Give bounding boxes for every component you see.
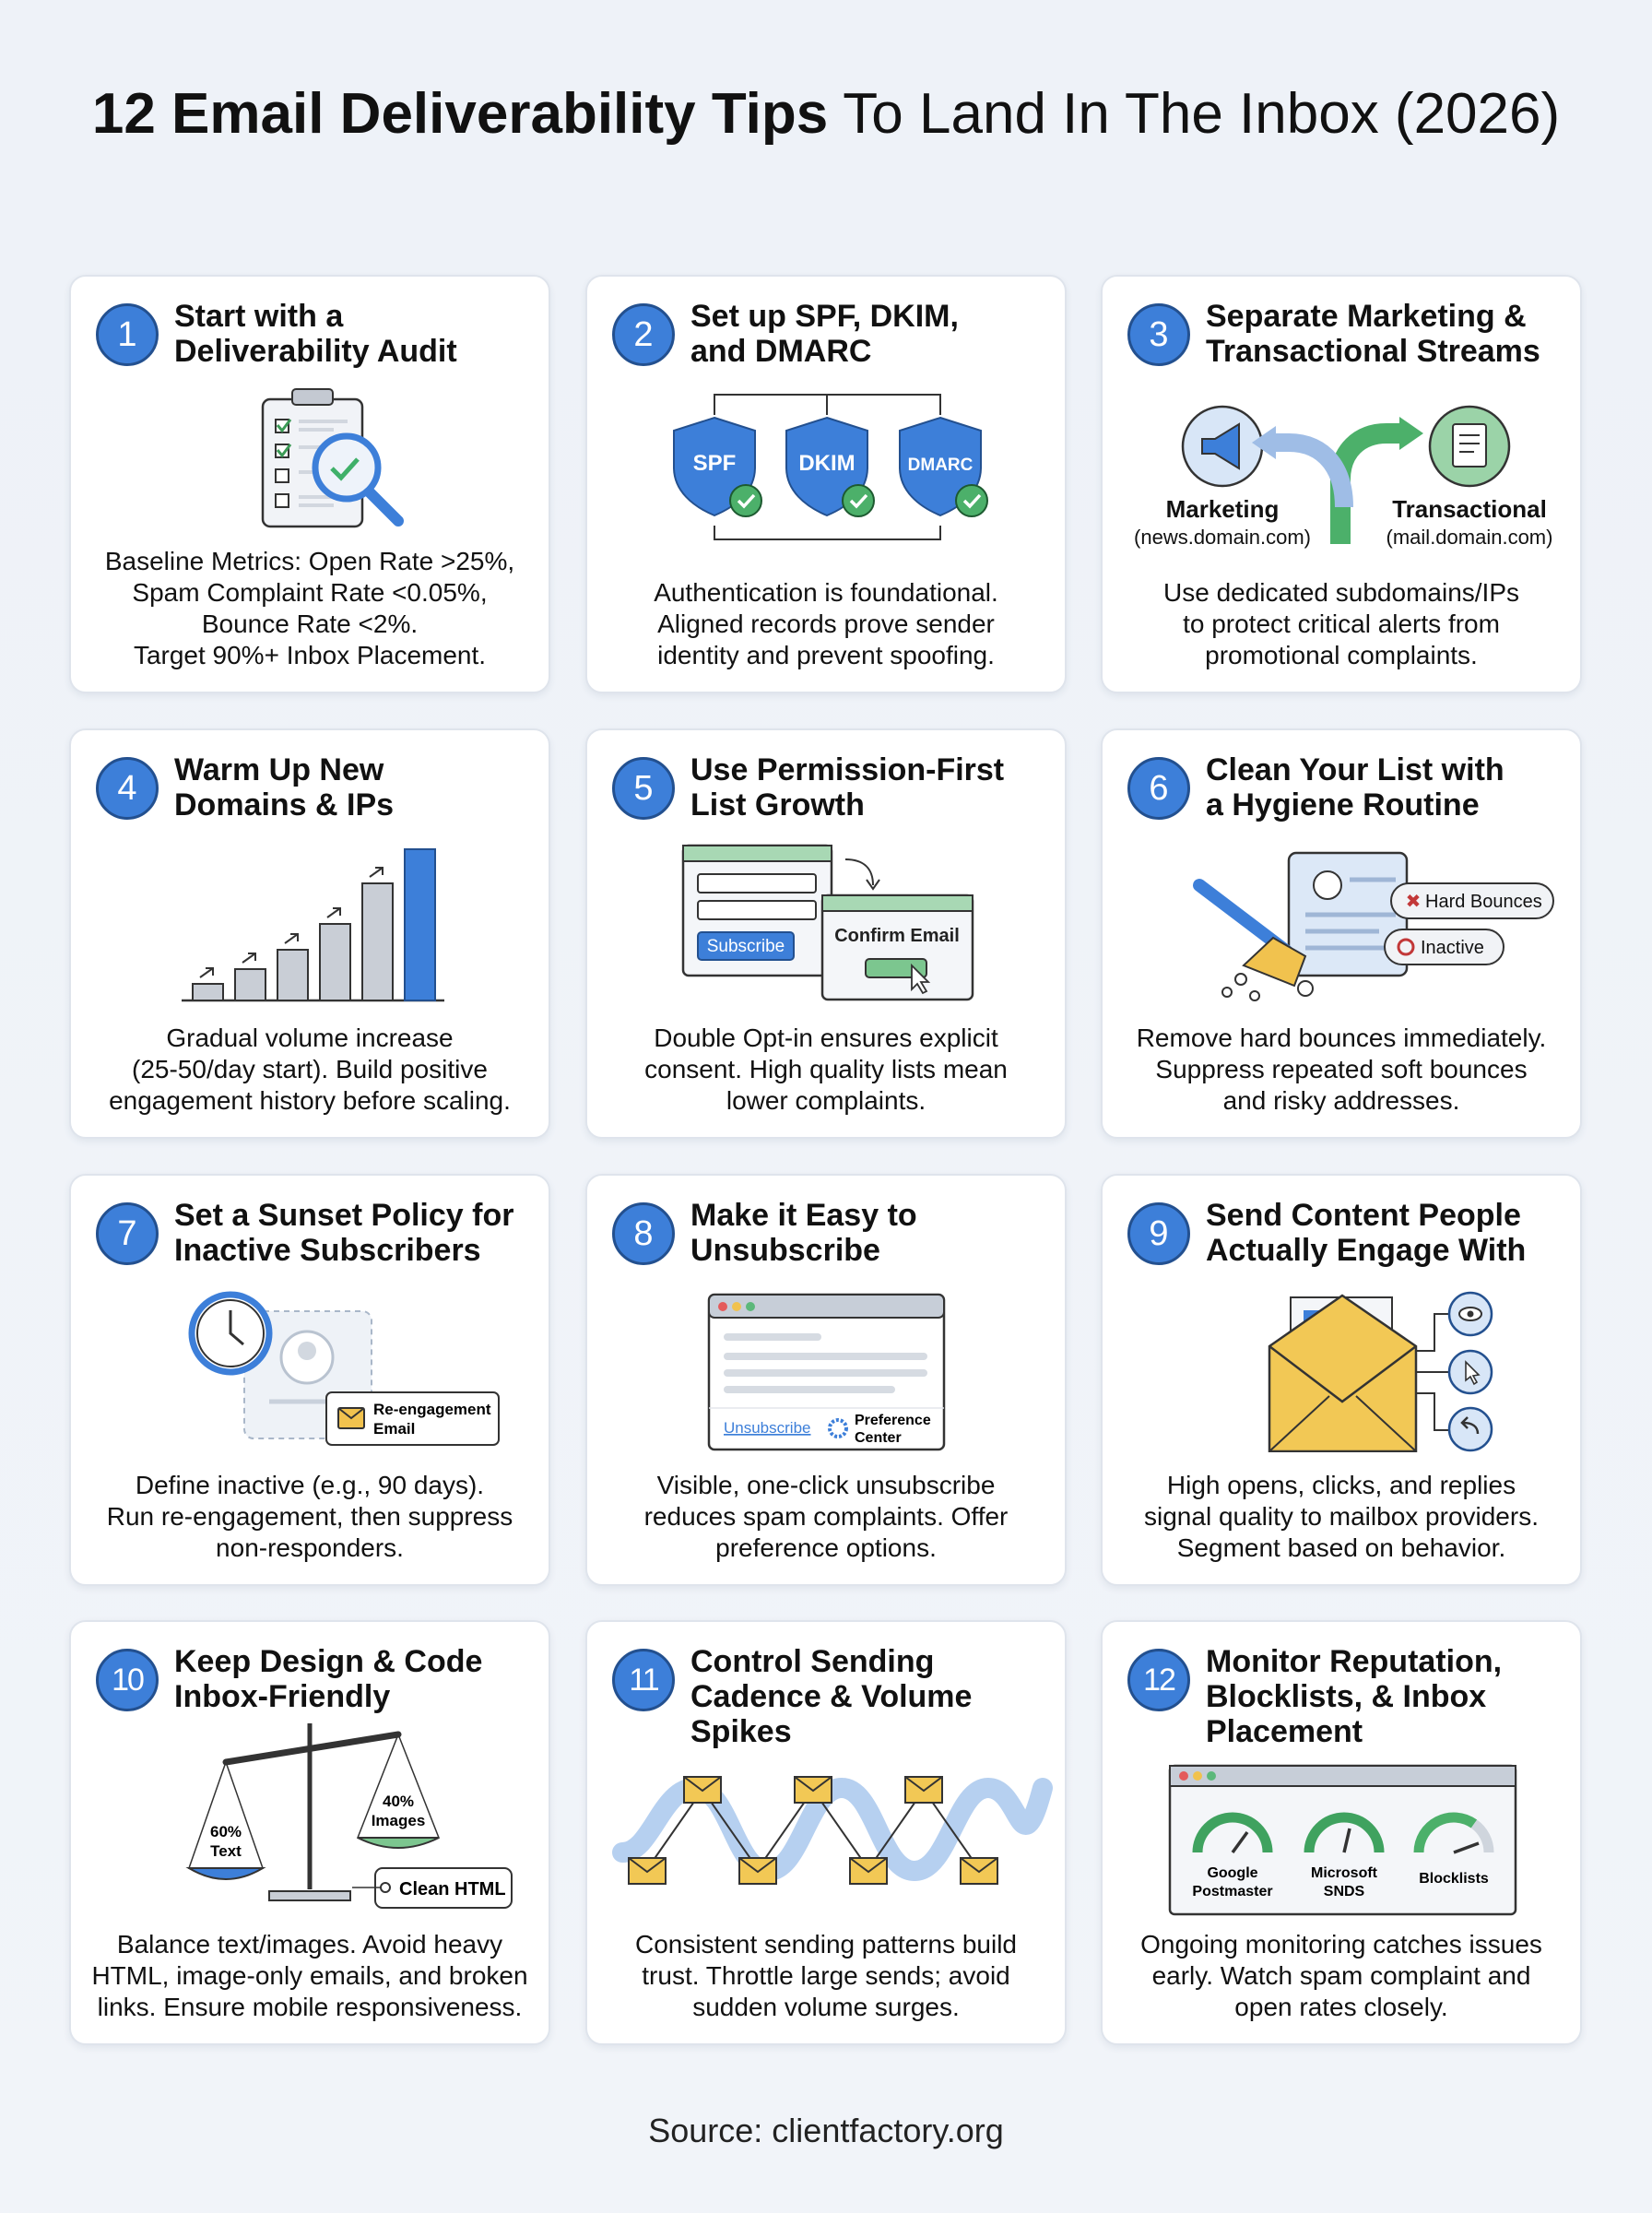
heading 9: Actually Engage With [1206, 1233, 1526, 1268]
number 1 [96, 303, 159, 366]
heading 12: Monitor Reputation, [1206, 1644, 1502, 1679]
body text 6: and risky addresses. [1223, 1086, 1459, 1115]
body text 11 [635, 1930, 1017, 2021]
number 7: 7 [117, 1214, 137, 1253]
body text 5: consent. High quality lists mean [644, 1055, 1008, 1083]
body text 3: to protect critical alerts from [1183, 609, 1500, 638]
panel: tip 11 cadence [585, 1620, 1067, 2045]
body text 9: Segment based on behavior. [1177, 1533, 1505, 1562]
number 6 [1127, 757, 1190, 820]
icon: split streams [1134, 406, 1552, 549]
heading 2 [690, 299, 959, 369]
heading 8: Unsubscribe [690, 1233, 880, 1268]
heading 10 [174, 1644, 482, 1714]
heading 1: Deliverability Audit [174, 334, 457, 369]
heading 12 [1206, 1644, 1502, 1749]
heading 4: Warm Up New [174, 752, 384, 787]
number 8 [612, 1202, 675, 1265]
number 12: 12 [1143, 1663, 1174, 1698]
icon: email window with unsubscribe: Center [855, 1430, 902, 1446]
body text 6 [1137, 1024, 1546, 1115]
heading 7: Inactive Subscribers [174, 1233, 481, 1268]
icon: brush list: Hard Bounces [1425, 892, 1542, 912]
icon: clock and profile [188, 1291, 500, 1446]
panel: tip 4 warm up [69, 728, 550, 1139]
body text 12: early. Watch spam complaint and [1152, 1961, 1530, 1990]
heading 5 [690, 752, 1004, 822]
panel: tip 12 monitor [1101, 1620, 1582, 2045]
number 8: 8 [633, 1214, 654, 1253]
body text 5: Double Opt-in ensures explicit [654, 1024, 998, 1052]
heading 1 [174, 299, 457, 369]
number 9 [1127, 1202, 1190, 1265]
heading 6: Clean Your List with [1206, 752, 1504, 787]
icon: clock and profile: Re-engagement [373, 1401, 491, 1418]
heading 6: a Hygiene Routine [1206, 787, 1480, 822]
body text 7 [107, 1471, 513, 1562]
panel: tip 10 design [69, 1620, 550, 2045]
heading 6 [1206, 752, 1504, 822]
icon: shields [673, 394, 988, 540]
icon: split streams: Marketing [1166, 495, 1279, 523]
icon: dashboard gauges: Google [1207, 1865, 1258, 1881]
icon: wave with envelopes [612, 1776, 1053, 1885]
icon: dashboard gauges: SNDS [1324, 1884, 1365, 1899]
body text 11: sudden volume surges. [692, 1993, 960, 2021]
heading 11 [690, 1644, 972, 1749]
body text 7: Run re-engagement, then suppress [107, 1502, 513, 1531]
body text 11: trust. Throttle large sends; avoid [642, 1961, 1010, 1990]
heading 9: Send Content People [1206, 1198, 1521, 1233]
body text 10: HTML, image-only emails, and broken [91, 1961, 528, 1990]
number 10: 10 [112, 1663, 143, 1698]
icon: brush list: Inactive [1421, 938, 1484, 958]
heading 2: and DMARC [690, 334, 871, 369]
body text 11: Consistent sending patterns build [635, 1930, 1017, 1959]
body text 5: lower complaints. [726, 1086, 926, 1115]
body text 2: identity and prevent spoofing. [657, 641, 995, 669]
number 3 [1127, 303, 1190, 366]
number 6: 6 [1149, 769, 1169, 808]
source footer: Source: clientfactory.org [648, 2112, 1004, 2149]
icon: email window with unsubscribe: Preference [855, 1413, 931, 1428]
icon: dashboard gauges: Blocklists [1419, 1871, 1489, 1887]
body text 2: Authentication is foundational. [654, 578, 998, 607]
body text 9 [1144, 1471, 1539, 1562]
icon: balance scale: Text [210, 1842, 242, 1860]
body text 4: Gradual volume increase [166, 1024, 454, 1052]
icon: brush list [1193, 852, 1554, 1001]
icon: clipboard magnifier [262, 388, 404, 527]
body text 12 [1140, 1930, 1542, 2021]
body text 1: Bounce Rate <2%. [202, 609, 418, 638]
heading 5: List Growth [690, 787, 865, 822]
body text 12: open rates closely. [1234, 1993, 1448, 2021]
body text 10 [91, 1930, 528, 2021]
number 3: 3 [1149, 315, 1169, 354]
panel: tip 3 streams [1101, 275, 1582, 693]
icon: dashboard gauges [1169, 1765, 1517, 1916]
body text 2: Aligned records prove sender [657, 609, 995, 638]
heading 11: Control Sending [690, 1644, 934, 1679]
number 12 [1127, 1649, 1190, 1711]
body text 1: Baseline Metrics: Open Rate >25%, [105, 547, 514, 575]
icon: dashboard gauges: Postmaster [1192, 1884, 1273, 1899]
panel: tip 8 unsubscribe [585, 1174, 1067, 1586]
body text 3 [1163, 578, 1519, 669]
body text 8: reduces spam complaints. Offer [644, 1502, 1008, 1531]
icon: dashboard gauges: Microsoft [1311, 1865, 1378, 1881]
body text 1: Spam Complaint Rate <0.05%, [132, 578, 488, 607]
heading 10: Keep Design & Code [174, 1644, 482, 1679]
heading 2: Set up SPF, DKIM, [690, 299, 959, 334]
icon: balance scale: 40% [383, 1793, 414, 1810]
heading 4 [174, 752, 394, 822]
heading 3 [1206, 299, 1540, 369]
icon: email window with unsubscribe [708, 1293, 946, 1451]
panel: tip 7 sunset [69, 1174, 550, 1586]
body text 7: Define inactive (e.g., 90 days). [136, 1471, 484, 1499]
panel: tip 5 permission [585, 728, 1067, 1139]
body text 12: Ongoing monitoring catches issues [1140, 1930, 1542, 1959]
body text 5 [644, 1024, 1008, 1115]
panel: tip 2 auth [585, 275, 1067, 693]
heading 9 [1206, 1198, 1526, 1268]
heading 7: Set a Sunset Policy for [174, 1198, 513, 1233]
heading 10: Inbox-Friendly [174, 1679, 390, 1714]
icon: brush list: ✖ [1406, 892, 1421, 912]
icon: shields: DKIM [798, 451, 856, 476]
number 4: 4 [117, 769, 137, 808]
body text 8: Visible, one-click unsubscribe [657, 1471, 995, 1499]
number 1: 1 [117, 315, 137, 354]
number 2: 2 [633, 315, 654, 354]
panel: tip 6 hygiene [1101, 728, 1582, 1139]
body text 10: Balance text/images. Avoid heavy [117, 1930, 502, 1959]
body text 3: promotional complaints. [1205, 641, 1478, 669]
body text 1: Target 90%+ Inbox Placement. [134, 641, 486, 669]
number 10 [96, 1649, 159, 1711]
heading 7 [174, 1198, 513, 1268]
icon: double opt-in windows: Subscribe [707, 937, 785, 956]
heading 11: Spikes [690, 1714, 792, 1749]
icon: double opt-in windows [682, 845, 974, 1001]
number 5 [612, 757, 675, 820]
icon: email window with unsubscribe: Unsubscribe [724, 1419, 811, 1437]
body text 1 [105, 547, 514, 669]
icon: balance scale [186, 1723, 513, 1909]
icon: clock and profile: Email [373, 1420, 415, 1438]
icon: split streams: (news.domain.com) [1134, 526, 1311, 549]
heading 8 [690, 1198, 917, 1268]
heading 12: Placement [1206, 1714, 1363, 1749]
panel: tip 1 audit [69, 275, 550, 693]
icon: balance scale: 60% [210, 1823, 242, 1840]
body text 4: engagement history before scaling. [109, 1086, 511, 1115]
number 7 [96, 1202, 159, 1265]
number 2 [612, 303, 675, 366]
heading 12: Blocklists, & Inbox [1206, 1679, 1486, 1714]
heading 8: Make it Easy to [690, 1198, 917, 1233]
chart: growing bars [182, 848, 444, 1001]
heading 1: Start with a [174, 299, 343, 334]
heading 3: Separate Marketing & [1206, 299, 1527, 334]
heading 11: Cadence & Volume [690, 1679, 972, 1714]
body text 8 [644, 1471, 1008, 1562]
body text 4 [109, 1024, 511, 1115]
panel: tip 9 engagement [1101, 1174, 1582, 1586]
body text 9: High opens, clicks, and replies [1167, 1471, 1516, 1499]
number 5: 5 [633, 769, 654, 808]
body text 10: links. Ensure mobile responsiveness. [98, 1993, 522, 2021]
icon: double opt-in windows: Confirm Email [834, 926, 960, 946]
heading 5: Use Permission-First [690, 752, 1004, 787]
body text 2 [654, 578, 998, 669]
body text 6: Suppress repeated soft bounces [1155, 1055, 1528, 1083]
icon: shields: SPF [693, 451, 736, 476]
body text 7: non-responders. [216, 1533, 404, 1562]
number 9: 9 [1149, 1214, 1169, 1253]
body text 6: Remove hard bounces immediately. [1137, 1024, 1546, 1052]
icon: balance scale: Images [372, 1812, 425, 1829]
icon: shields: DMARC [908, 456, 974, 475]
body text 8: preference options. [715, 1533, 937, 1562]
number 11 [612, 1649, 675, 1711]
body text 3: Use dedicated subdomains/IPs [1163, 578, 1519, 607]
icon: balance scale: Clean HTML [399, 1879, 506, 1899]
number 4 [96, 757, 159, 820]
icon: split streams: Transactional [1392, 495, 1547, 523]
number 11: 11 [629, 1663, 658, 1698]
body text 4: (25-50/day start). Build positive [132, 1055, 488, 1083]
body text 9: signal quality to mailbox providers. [1144, 1502, 1539, 1531]
heading 4: Domains & IPs [174, 787, 394, 822]
icon: split streams: (mail.domain.com) [1386, 526, 1552, 549]
heading 3: Transactional Streams [1206, 334, 1540, 369]
title: 12 Email Deliverability Tips To Land In The Inbox (2026) [92, 82, 1560, 146]
icon: envelope with actions [1268, 1291, 1493, 1452]
